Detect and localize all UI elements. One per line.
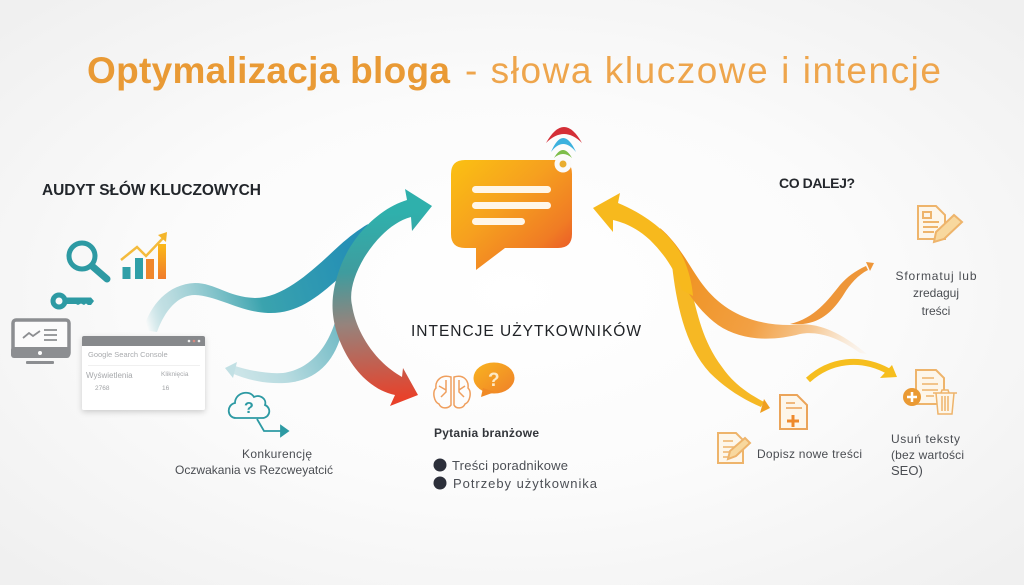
- panel: search console: Kliknięcia: [161, 371, 189, 378]
- heading: audyt słów kluczowych: AUDYT SŁÓW KLUCZOWYCH: [42, 181, 261, 199]
- flow: orange ribbon to right: [660, 228, 867, 354]
- list: branżowe: Potrzeby użytkownika: [453, 476, 598, 491]
- arrow: teal to red arc: [333, 189, 432, 406]
- icon: growth chart: [121, 232, 167, 279]
- panel: search console: Google Search Console: [88, 350, 168, 359]
- panel: search console: [82, 336, 205, 410]
- text: dopisz: Dopisz nowe treści: [757, 447, 862, 461]
- text: sformatuj: treści: [922, 304, 950, 318]
- text: pytania branżowe: Pytania branżowe: [434, 426, 539, 440]
- flow: teal wave: [143, 224, 368, 332]
- panel: search console: 16: [162, 385, 170, 392]
- flow: thin yellow branch: [672, 265, 770, 413]
- arrow: small yellow: [808, 362, 897, 380]
- text: sformatuj: Sformatuj lub: [896, 269, 977, 283]
- text: konkurencję: Oczwakania vs Rezcweyatcić: [175, 463, 333, 477]
- list: branżowe: Treści poradnikowe: [452, 458, 568, 473]
- icon: note and pencil: [718, 433, 750, 463]
- panel: search console: 2768: [95, 385, 110, 392]
- icon: monitor: [11, 320, 70, 364]
- text: konkurencję: [175, 447, 333, 477]
- text: sformatuj: [896, 269, 977, 318]
- arrow: large yellow: [593, 193, 693, 296]
- text: usuń: [891, 432, 964, 478]
- icon: question bubble: [474, 362, 514, 397]
- title: [87, 50, 941, 91]
- heading: intencje użytkowników: INTENCJE UŻYTKOWNIKÓW: [411, 322, 641, 340]
- title: Optymalizacja bloga: [87, 50, 450, 91]
- icon: document and pencil: [918, 206, 962, 242]
- list: branżowe: [434, 458, 598, 491]
- icon: chat bubble: [451, 160, 572, 270]
- text: usuń: Usuń teksty: [891, 432, 960, 446]
- text: sformatuj: zredaguj: [913, 286, 959, 300]
- icon: magnifier: [69, 243, 107, 279]
- flow: pale return arrow: [225, 322, 342, 383]
- text: usuń: SEO): [891, 463, 923, 478]
- panel: search console: Wyświetlenia: [86, 371, 133, 380]
- title: - słowa kluczowe i intencje: [465, 50, 941, 91]
- text: konkurencję: Konkurencję: [242, 447, 312, 461]
- icon: wifi signal: [546, 127, 582, 172]
- arrow: orange branch up: [790, 262, 874, 324]
- icon: key: [53, 295, 94, 307]
- text: usuń: (bez wartości: [891, 448, 964, 462]
- icon: question bubble: ?: [488, 370, 500, 391]
- icon: cloud with question mark: [229, 393, 288, 436]
- heading: co dalej: CO DALEJ?: [779, 175, 855, 191]
- icon: cloud with question mark: ?: [244, 400, 254, 417]
- icon: new document: [780, 395, 807, 429]
- icon: brain: [434, 376, 470, 408]
- icon: delete document: [903, 370, 957, 414]
